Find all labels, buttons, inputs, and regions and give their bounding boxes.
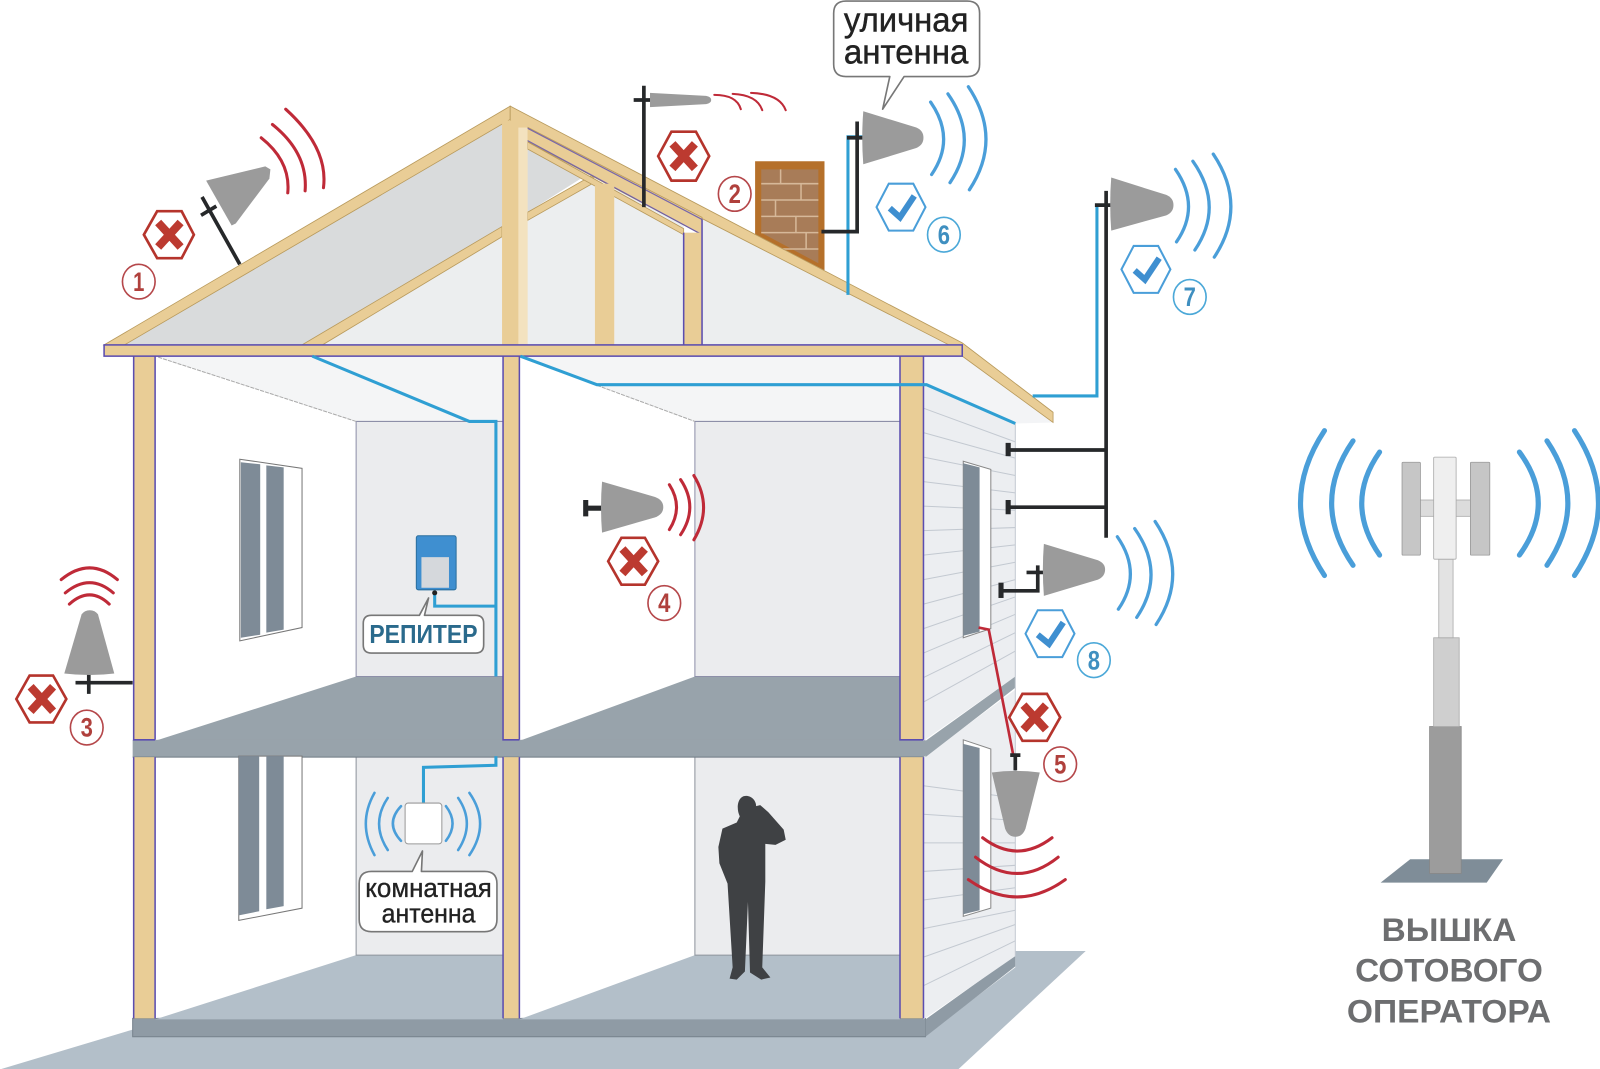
wooden pillars [134, 356, 923, 1018]
panel: side wall with siding [923, 383, 1015, 1019]
house foundation [133, 955, 1015, 1037]
callout: repeater [363, 598, 484, 653]
number 8 [1078, 643, 1110, 678]
panel: upper right room [519, 356, 900, 741]
antenna 5 with red cable and signal [968, 628, 1065, 897]
callout: outdoor antenna: антенна [844, 33, 969, 71]
window: left lower [239, 756, 302, 920]
tower label: СОТОВОГО [1355, 952, 1543, 989]
window: left upper [240, 459, 302, 641]
callout: indoor antenna: комнатная [365, 873, 492, 903]
antenna 6 with signal [821, 87, 986, 232]
number 1: 1 [133, 267, 145, 297]
badge: X for antenna 5 [1009, 694, 1060, 741]
blue cables [312, 137, 1110, 806]
panel: lower left room [155, 756, 503, 1019]
number 6: 6 [938, 220, 950, 250]
number 3: 3 [81, 713, 93, 743]
roof soffit [923, 356, 1053, 423]
callout: repeater: РЕПИТЕР [369, 621, 478, 649]
person on phone [718, 796, 786, 980]
window: side lower [963, 740, 991, 916]
cell tower [1381, 457, 1503, 883]
number 5 [1044, 747, 1077, 782]
attic walls [122, 120, 951, 345]
antenna 8 with signal [1001, 521, 1173, 624]
number 4 [648, 586, 681, 620]
number 5: 5 [1054, 749, 1067, 779]
window: side upper [963, 461, 991, 638]
badge: check for antenna 7 [1121, 246, 1170, 293]
badge: check for antenna 8 [1026, 610, 1074, 657]
number 3 [70, 710, 103, 745]
tower label [1347, 911, 1551, 1029]
badge: X for antenna 2 [658, 132, 709, 181]
number 8: 8 [1088, 645, 1100, 675]
number 7: 7 [1184, 282, 1196, 312]
callout: outdoor antenna: уличная [844, 2, 968, 40]
callout: indoor antenna [359, 851, 497, 932]
floor slab [133, 740, 926, 757]
badge: X for antenna 3 [16, 676, 66, 722]
roof frame [104, 106, 1053, 422]
badge: X for antenna 1 [144, 211, 194, 258]
indoor antenna [366, 793, 480, 855]
badge: check for antenna 6 [877, 184, 926, 231]
repeater unit [416, 536, 456, 595]
number 6 [928, 217, 960, 252]
number 4: 4 [658, 588, 671, 618]
antenna 7 with mast and signal [1008, 154, 1231, 538]
number 7 [1173, 280, 1206, 314]
antenna 1 with signal [201, 109, 324, 264]
antenna 3 with signal [61, 568, 133, 694]
ground plane [0, 951, 1086, 1069]
panel: lower right room [519, 756, 900, 1019]
antenna 2 with weak signal [634, 86, 786, 207]
number 1 [122, 264, 155, 299]
number 2: 2 [729, 179, 741, 209]
number 2 [718, 177, 751, 211]
tower signal waves [1301, 431, 1598, 576]
antenna 4 with signal [586, 476, 704, 540]
tower label: ОПЕРАТОРА [1347, 992, 1551, 1029]
callout: indoor antenna: антенна [382, 898, 476, 928]
panel: upper left room [155, 356, 503, 741]
chimney [755, 161, 824, 270]
tower label: ВЫШКА [1382, 911, 1516, 948]
badge: X for antenna 4 [608, 538, 658, 585]
callout: outdoor antenna [834, 1, 980, 109]
